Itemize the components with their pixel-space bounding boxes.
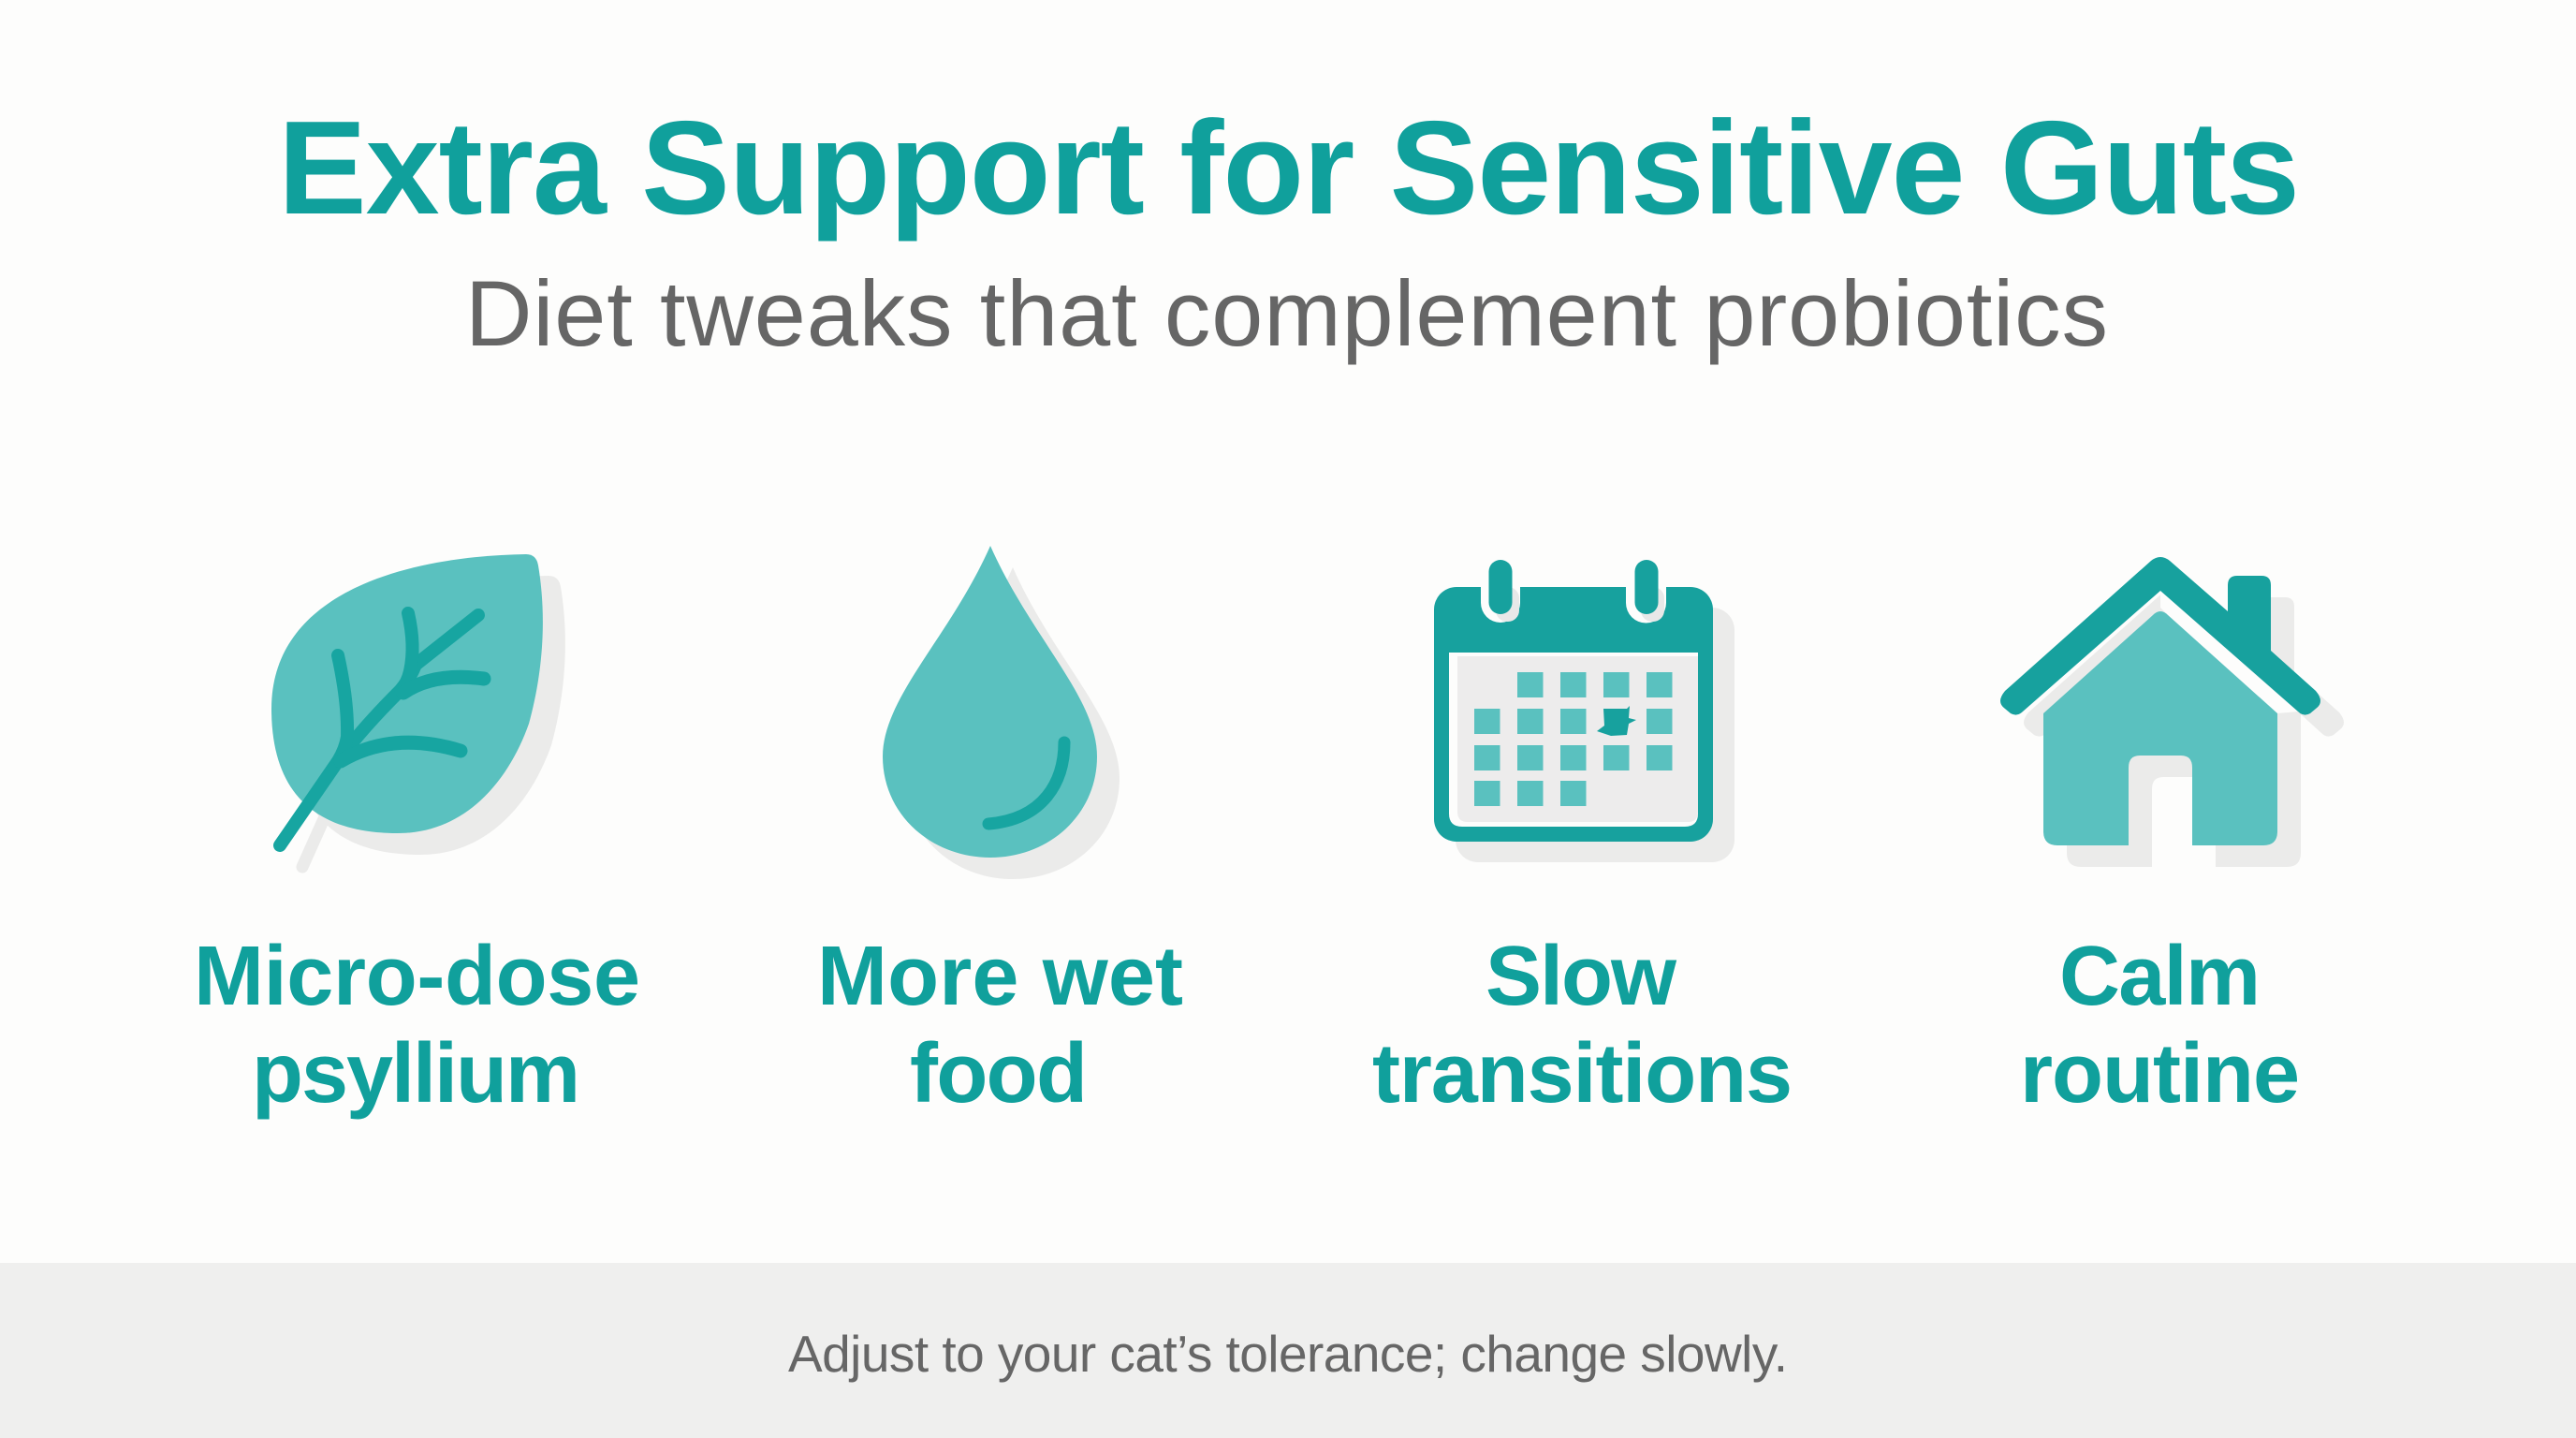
panel: slow transitions [1372, 560, 1793, 1121]
label: micro-dose psyllium: Micro-dose [194, 930, 640, 1023]
label: calm routine: Calm [2059, 930, 2261, 1023]
icon: house [2000, 557, 2344, 867]
label: micro-dose psyllium [194, 930, 640, 1121]
label: calm routine: routine [2020, 1027, 2300, 1121]
panel: more wet food [817, 546, 1183, 1121]
label: more wet food: More wet [817, 930, 1183, 1023]
label: more wet food: food [910, 1027, 1088, 1121]
icon: water drop [883, 546, 1120, 879]
label: slow transitions [1372, 930, 1793, 1121]
label: calm routine [2020, 930, 2300, 1121]
icon: calendar [1434, 560, 1734, 862]
panel: calm routine [2000, 557, 2344, 1121]
subtitle: Diet tweaks that complement probiotics [465, 261, 2108, 365]
footer note: Adjust to your cat’s tolerance; change slowly. [788, 1325, 1788, 1383]
calendar rings [1481, 560, 1666, 624]
label: slow transitions: Slow [1486, 930, 1677, 1023]
label: more wet food [817, 930, 1183, 1121]
label: micro-dose psyllium: psyllium [252, 1027, 580, 1121]
label: slow transitions: transitions [1372, 1027, 1793, 1121]
panel: micro-dose psyllium [194, 554, 640, 1121]
calendar day grid [1474, 672, 1672, 806]
icon: leaf [271, 554, 565, 867]
footer band [0, 1263, 2576, 1438]
title: Extra Support for Sensitive Guts [278, 94, 2300, 242]
